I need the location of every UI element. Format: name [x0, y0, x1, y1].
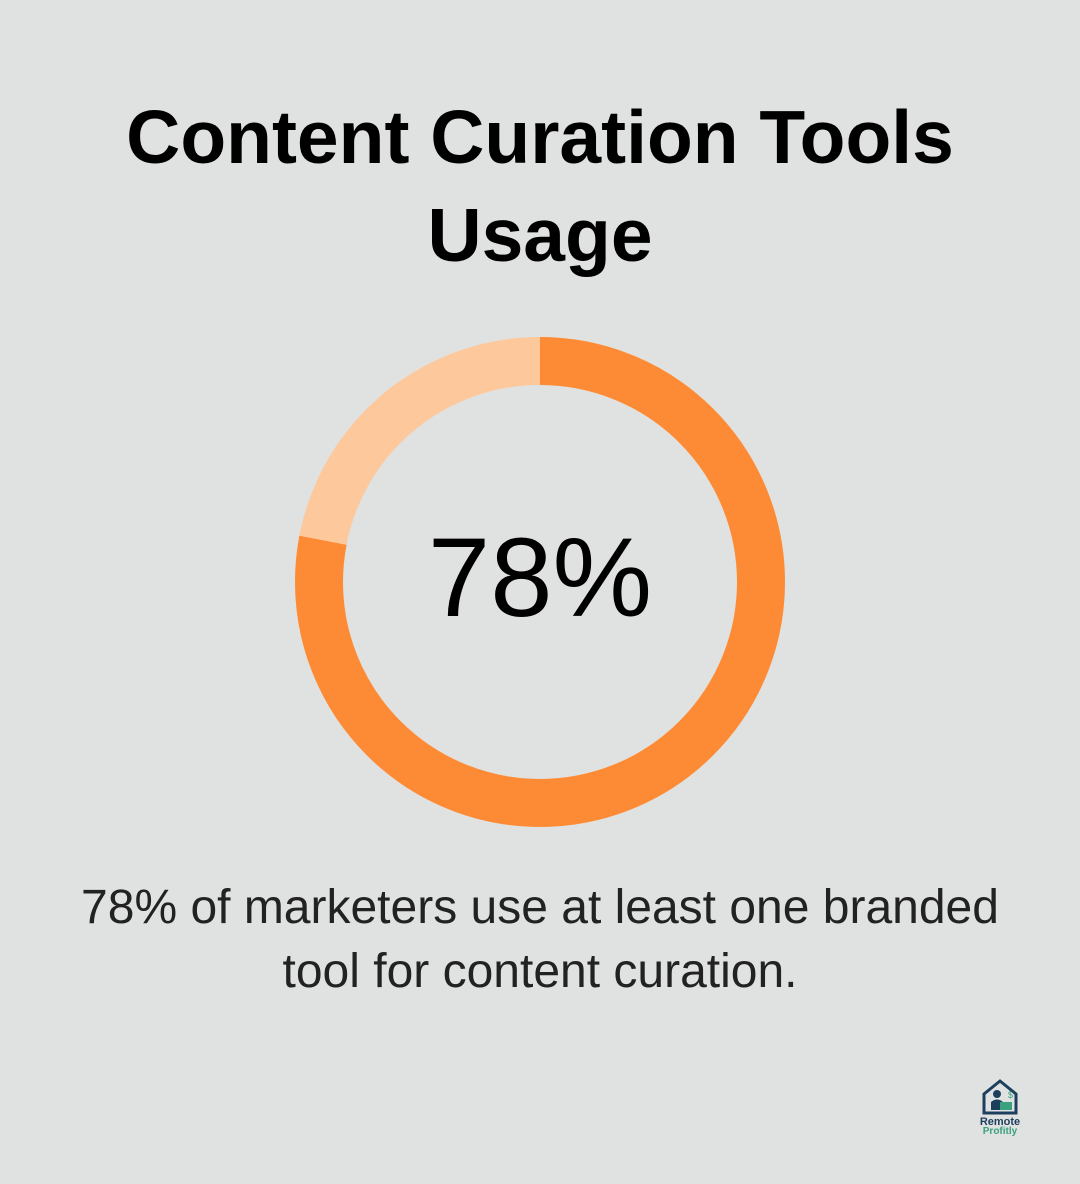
title: Content Curation Tools [126, 95, 954, 179]
logo [980, 1079, 1020, 1137]
caption: 78% of marketers use at least one branded [81, 881, 999, 934]
logo: Remote [980, 1116, 1020, 1128]
caption: tool for content curation. [283, 945, 797, 998]
title [126, 95, 954, 277]
caption [81, 881, 999, 998]
donut chart: 78% [428, 515, 652, 640]
title: Usage [427, 193, 653, 277]
logo: Profitly [983, 1126, 1017, 1137]
logo: $ [1008, 1090, 1013, 1100]
